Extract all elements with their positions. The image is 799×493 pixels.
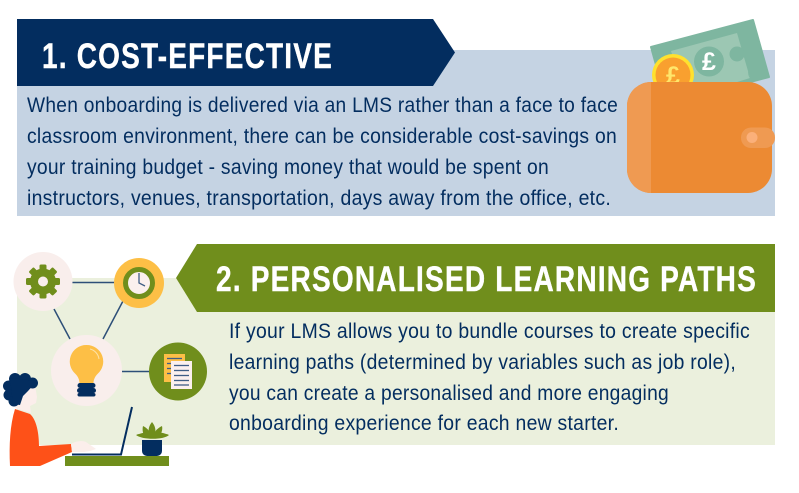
text block: cost-effective description: instructors, venues, transportation, days away from the office, etc.: [27, 186, 611, 210]
text block: learning paths description: onboarding experience for each new starter.: [229, 411, 619, 435]
text block: cost-effective description: classroom environment, there can be considerable cost-savings on: [27, 124, 617, 148]
text block: cost-effective description: When onboarding is delivered via an LMS rather than a face to face: [27, 93, 618, 117]
icon: banknote: £: [702, 48, 716, 76]
panel: personalised learning paths: [17, 244, 775, 445]
icon: coin: £: [666, 62, 680, 90]
illustration: connected ideas and person at laptop: [3, 252, 207, 466]
icon: documents: [149, 342, 207, 400]
text block: cost-effective description: your training budget - saving money that would be spent on: [27, 155, 549, 179]
icon: plant: [136, 422, 169, 456]
text block: learning paths description: learning paths (determined by variables such as job role),: [229, 350, 736, 374]
text block: learning paths description: you can create a personalised and more engaging: [229, 381, 669, 405]
icon: laptop: [72, 407, 132, 454]
icon: banknote: [650, 19, 770, 82]
icon: person: [3, 373, 96, 466]
text block: learning paths description: If your LMS allows you to bundle courses to create specific: [229, 319, 750, 343]
text block: learning paths description: [229, 319, 750, 435]
banner: cost-effective heading: 1. COST-EFFECTIVE: [42, 37, 333, 76]
icon: gear: [14, 252, 72, 311]
banner: cost-effective heading: [17, 19, 455, 86]
icon: wallet with money: [627, 20, 775, 193]
panel: cost-effective: [17, 19, 775, 216]
icon: light bulb: [51, 335, 122, 406]
icon: clock: [114, 258, 164, 308]
icon: desk: [65, 456, 169, 466]
connector lines: [54, 282, 150, 372]
icon: wallet body: [627, 82, 775, 193]
icon: coin: [652, 54, 694, 96]
banner: learning paths heading: [176, 244, 775, 312]
text block: cost-effective description: [27, 93, 618, 210]
